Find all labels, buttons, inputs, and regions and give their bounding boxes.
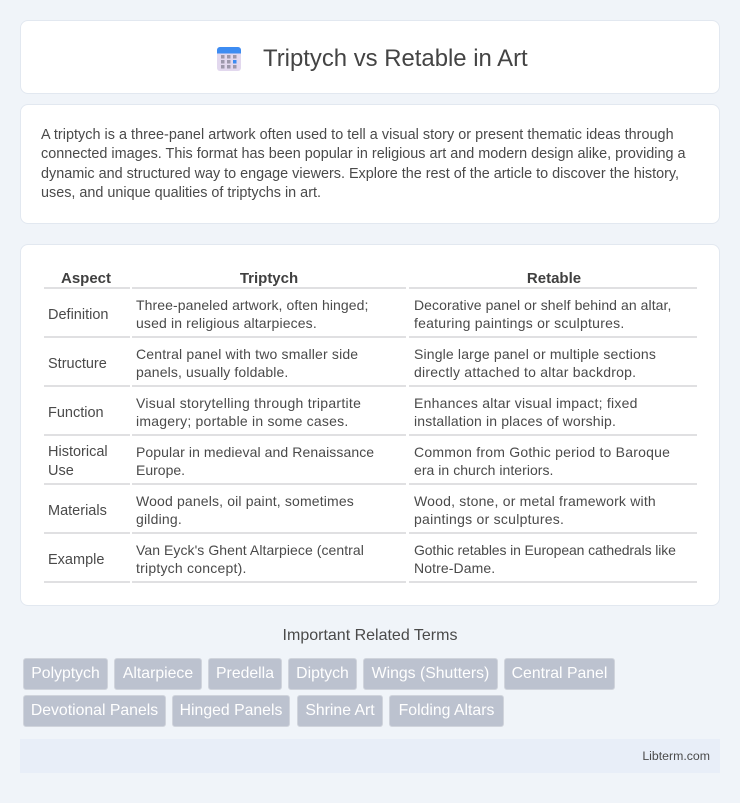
footer credit: Libterm.com (642, 749, 710, 763)
row: function: Enhances altar visual impact; fixed (414, 395, 638, 411)
row: function (48, 395, 638, 429)
row: function: imagery; portable in some cases. (136, 413, 348, 429)
row: definition: Definition (48, 307, 108, 323)
related terms tags: Hinged Panels (180, 702, 282, 719)
related terms tags: Shrine Art (305, 702, 375, 719)
intro text (41, 127, 686, 201)
row: example: Notre-Dame. (414, 560, 495, 576)
intro text: connected images. This format has been popular in religious art and modern design alike, providing a (41, 146, 686, 162)
table header: Retable (527, 270, 581, 287)
related terms tags (23, 658, 615, 727)
row: definition (48, 297, 671, 331)
row: definition: Three-paneled artwork, often hinged; (136, 297, 368, 313)
row: historical use: Popular in medieval and Renaissance (136, 444, 374, 460)
row: historical use: Historical (48, 444, 108, 460)
header panel (20, 20, 720, 94)
row: definition: used in religious altarpieces. (136, 315, 317, 331)
row: function: Visual storytelling through tripartite (136, 395, 361, 411)
icon: calendar grid (217, 47, 241, 71)
row: example: Van Eyck's Ghent Altarpiece (central (136, 542, 364, 558)
related terms tags: Devotional Panels (31, 702, 158, 719)
intro panel (20, 104, 720, 224)
title: Triptych vs Retable in Art (263, 45, 528, 72)
table header: Aspect (61, 270, 111, 287)
related terms tags: Central Panel (512, 665, 607, 682)
row: example: triptych concept). (136, 560, 247, 576)
intro text: dynamic and structured way to engage viewers. Explore the rest of the article to discover the history, (41, 166, 679, 182)
row: function: installation in places of worship. (414, 413, 616, 429)
row: historical use: Use (48, 463, 74, 479)
row: materials: gilding. (136, 511, 182, 527)
row: materials (48, 493, 656, 527)
related terms tags: Diptych (296, 665, 349, 682)
related terms tags: Predella (216, 665, 274, 682)
related terms tags: Polyptych (31, 665, 100, 682)
row: example (48, 542, 676, 576)
row: materials: Wood, stone, or metal framework with (414, 493, 656, 509)
footer bar (20, 739, 720, 773)
row: historical use: Europe. (136, 462, 185, 478)
related terms heading: Important Related Terms (283, 627, 457, 644)
related terms tags: Folding Altars (399, 702, 494, 719)
row: historical use: era in church interiors. (414, 462, 553, 478)
row: definition: Decorative panel or shelf behind an altar, (414, 297, 671, 313)
row: historical use: Common from Gothic period to Baroque (414, 444, 670, 460)
row: historical use (48, 444, 670, 479)
row: example: Example (48, 552, 104, 568)
row: materials: Wood panels, oil paint, sometimes (136, 493, 354, 509)
row: function: Function (48, 405, 104, 421)
intro text: A triptych is a three-panel artwork often used to tell a visual story or present thematic ideas through (41, 127, 674, 143)
row: materials: paintings or sculptures. (414, 511, 564, 527)
row: structure: directly attached to altar backdrop. (414, 364, 636, 380)
row: structure: Structure (48, 356, 107, 372)
related terms tags: Wings (Shutters) (372, 665, 489, 682)
row: materials: Materials (48, 503, 107, 519)
row: structure: Central panel with two smaller side (136, 346, 358, 362)
related terms tags: Altarpiece (123, 665, 193, 682)
intro text: uses, and unique qualities of triptychs in art. (41, 185, 321, 201)
panel: comparison table (20, 244, 720, 606)
table header (61, 270, 581, 287)
table header: Triptych (240, 270, 298, 287)
row: definition: featuring paintings or sculptures. (414, 315, 624, 331)
row: structure (48, 346, 656, 380)
row: structure: Single large panel or multiple sections (414, 346, 656, 362)
row: example: Gothic retables in European cathedrals like (414, 542, 676, 558)
row: structure: panels, usually foldable. (136, 364, 288, 380)
